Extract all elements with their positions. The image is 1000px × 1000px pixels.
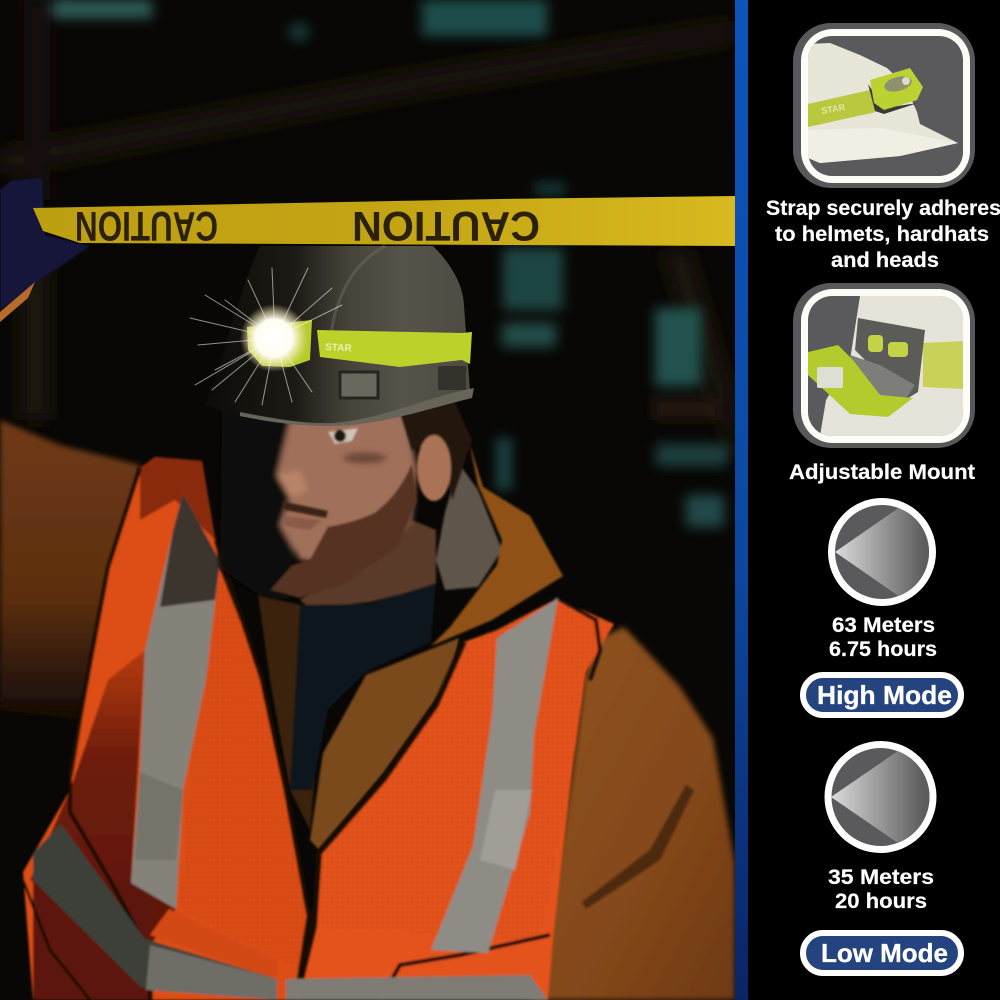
safety vest: orange panels <box>23 457 614 1000</box>
jacket: body and sleeves <box>0 420 735 1000</box>
center jacket panel <box>310 638 459 850</box>
reflective strip: lower band <box>33 824 277 1000</box>
neck <box>300 520 436 608</box>
tape lettering (rotated): CAUTION <box>352 203 540 250</box>
caption: adjustable mount: Adjustable Mount <box>789 461 975 484</box>
headlamp with light burst <box>190 268 342 405</box>
background: blurred site beams and teal windows <box>0 7 734 430</box>
reflective strip: right <box>431 598 558 953</box>
text: low mode specs: 35 Meters <box>828 866 934 889</box>
caption: strap <box>766 197 1000 272</box>
text: low mode specs <box>828 866 934 913</box>
icon: headlamp on helmet tile: STAR <box>821 102 846 116</box>
worker face and beard <box>220 402 472 600</box>
hardhat <box>205 246 474 426</box>
caption: strap: Strap securely adheres <box>766 197 1000 220</box>
badge: low mode <box>803 933 961 973</box>
icon: headlamp on helmet tile <box>793 23 975 188</box>
text: high mode specs: 6.75 hours <box>829 638 937 661</box>
fleece lining <box>436 464 502 590</box>
badge: high mode: High Mode <box>817 680 952 710</box>
hood <box>431 442 563 646</box>
glove holding tape <box>0 178 90 310</box>
vest piping <box>70 468 150 1000</box>
tape lettering (rotated): CAUTION <box>75 203 218 250</box>
text: high mode specs <box>829 614 937 661</box>
blue divider bar <box>735 0 748 1000</box>
vest mesh texture <box>182 576 305 968</box>
icon: high mode beam <box>828 498 940 606</box>
caution tape <box>33 196 735 250</box>
icon: low mode beam <box>824 741 940 853</box>
caption: strap: and heads <box>831 249 939 272</box>
badge: low mode: Low Mode <box>821 938 948 968</box>
reflective strip: left <box>131 494 220 909</box>
panel: right features column <box>766 23 1000 973</box>
right panel <box>296 598 614 1000</box>
text: low mode specs: 20 hours <box>835 890 927 913</box>
badge: high mode <box>803 675 961 715</box>
panel: photo of worker wearing headlamp: STAR <box>325 342 353 354</box>
tape lettering (rotated) <box>77 212 538 241</box>
headband strap <box>317 330 472 367</box>
icon: adjustable mount tile <box>793 283 975 448</box>
shirt <box>290 583 436 790</box>
text: high mode specs: 63 Meters <box>832 614 935 637</box>
caption: strap: to helmets, hardhats <box>775 223 989 246</box>
panel: photo of worker wearing headlamp <box>0 0 735 1000</box>
ear <box>417 435 451 501</box>
left panel <box>23 457 309 1000</box>
